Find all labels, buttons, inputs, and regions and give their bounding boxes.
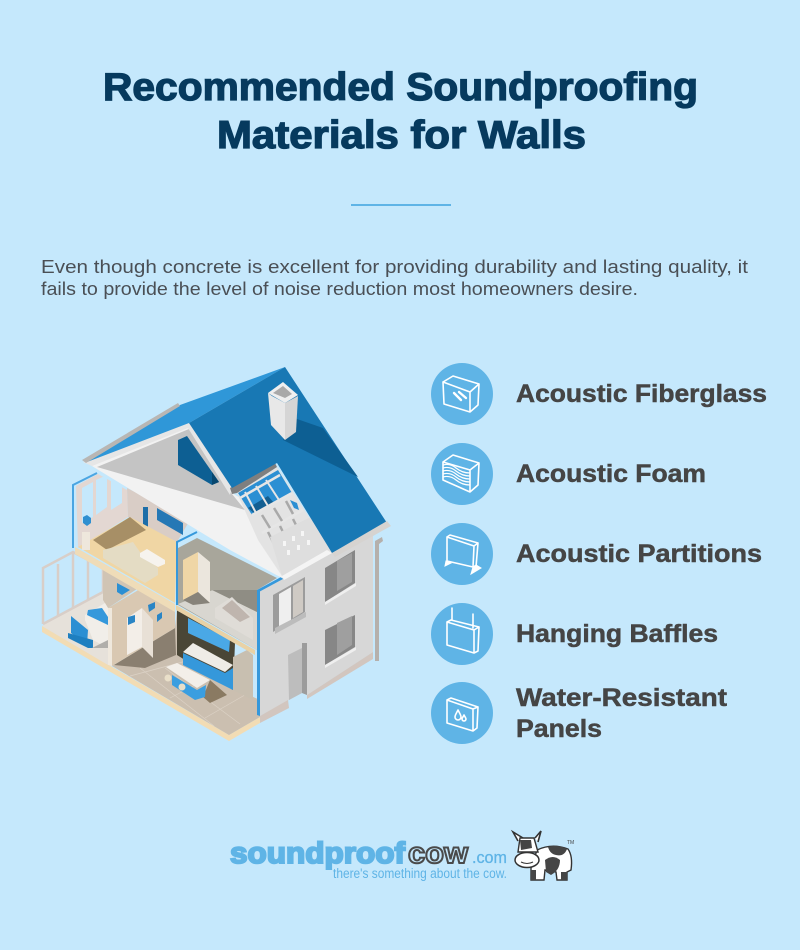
icon: partition bbox=[431, 523, 493, 585]
balcony railing bbox=[43, 552, 103, 624]
item: water-resistant panels bbox=[431, 682, 728, 744]
icon: water panel bbox=[431, 682, 493, 744]
roof dormer and rafters bbox=[230, 463, 332, 580]
logo bbox=[230, 831, 574, 881]
logo: .com bbox=[472, 848, 507, 867]
icon: cow: TM bbox=[567, 840, 574, 846]
item: acoustic fiberglass bbox=[431, 363, 767, 425]
icon: foam block bbox=[431, 443, 493, 505]
bedroom partition bbox=[108, 589, 175, 666]
intro text: Even though concrete is excellent for providing durability and lasting quality, it bbox=[41, 257, 748, 277]
kitchen bbox=[164, 618, 253, 703]
item: acoustic partitions: Acoustic Partitions bbox=[516, 540, 762, 568]
roof bbox=[82, 367, 391, 557]
windows bbox=[273, 550, 356, 668]
icon: cow bbox=[513, 831, 574, 880]
floor lamp bbox=[82, 515, 91, 550]
intro text bbox=[41, 257, 748, 299]
exterior wall bbox=[257, 530, 383, 723]
title: Materials for Walls bbox=[217, 114, 586, 157]
chimney bbox=[268, 382, 298, 440]
icon: baffle bbox=[431, 603, 493, 665]
item: water-resistant panels: Water-Resistant bbox=[516, 684, 728, 712]
bedroom bbox=[68, 566, 140, 648]
ground floor slab bbox=[42, 592, 260, 741]
intro text: fails to provide the level of noise reduction most homeowners desire. bbox=[41, 279, 638, 299]
downpipe bbox=[375, 537, 383, 661]
icon: fiberglass panel bbox=[431, 363, 493, 425]
logo: cow bbox=[408, 837, 469, 870]
gable underside bbox=[83, 421, 332, 578]
item: acoustic foam: Acoustic Foam bbox=[516, 460, 706, 488]
item: hanging baffles bbox=[431, 603, 718, 665]
item: water-resistant panels: Panels bbox=[516, 715, 602, 743]
bathroom bbox=[176, 532, 277, 655]
logo: there's something about the cow. bbox=[333, 866, 507, 881]
house illustration bbox=[42, 367, 391, 741]
logo: soundproof bbox=[230, 837, 406, 870]
item: hanging baffles: Hanging Baffles bbox=[516, 620, 718, 648]
upper floor slab bbox=[75, 515, 177, 612]
item: acoustic foam bbox=[431, 443, 706, 505]
item: acoustic partitions bbox=[431, 523, 762, 585]
title bbox=[103, 66, 698, 157]
upper left room back wall and windows bbox=[73, 472, 190, 548]
title: Recommended Soundproofing bbox=[103, 66, 698, 109]
door bbox=[288, 643, 307, 700]
item: acoustic fiberglass: Acoustic Fiberglass bbox=[516, 380, 767, 408]
